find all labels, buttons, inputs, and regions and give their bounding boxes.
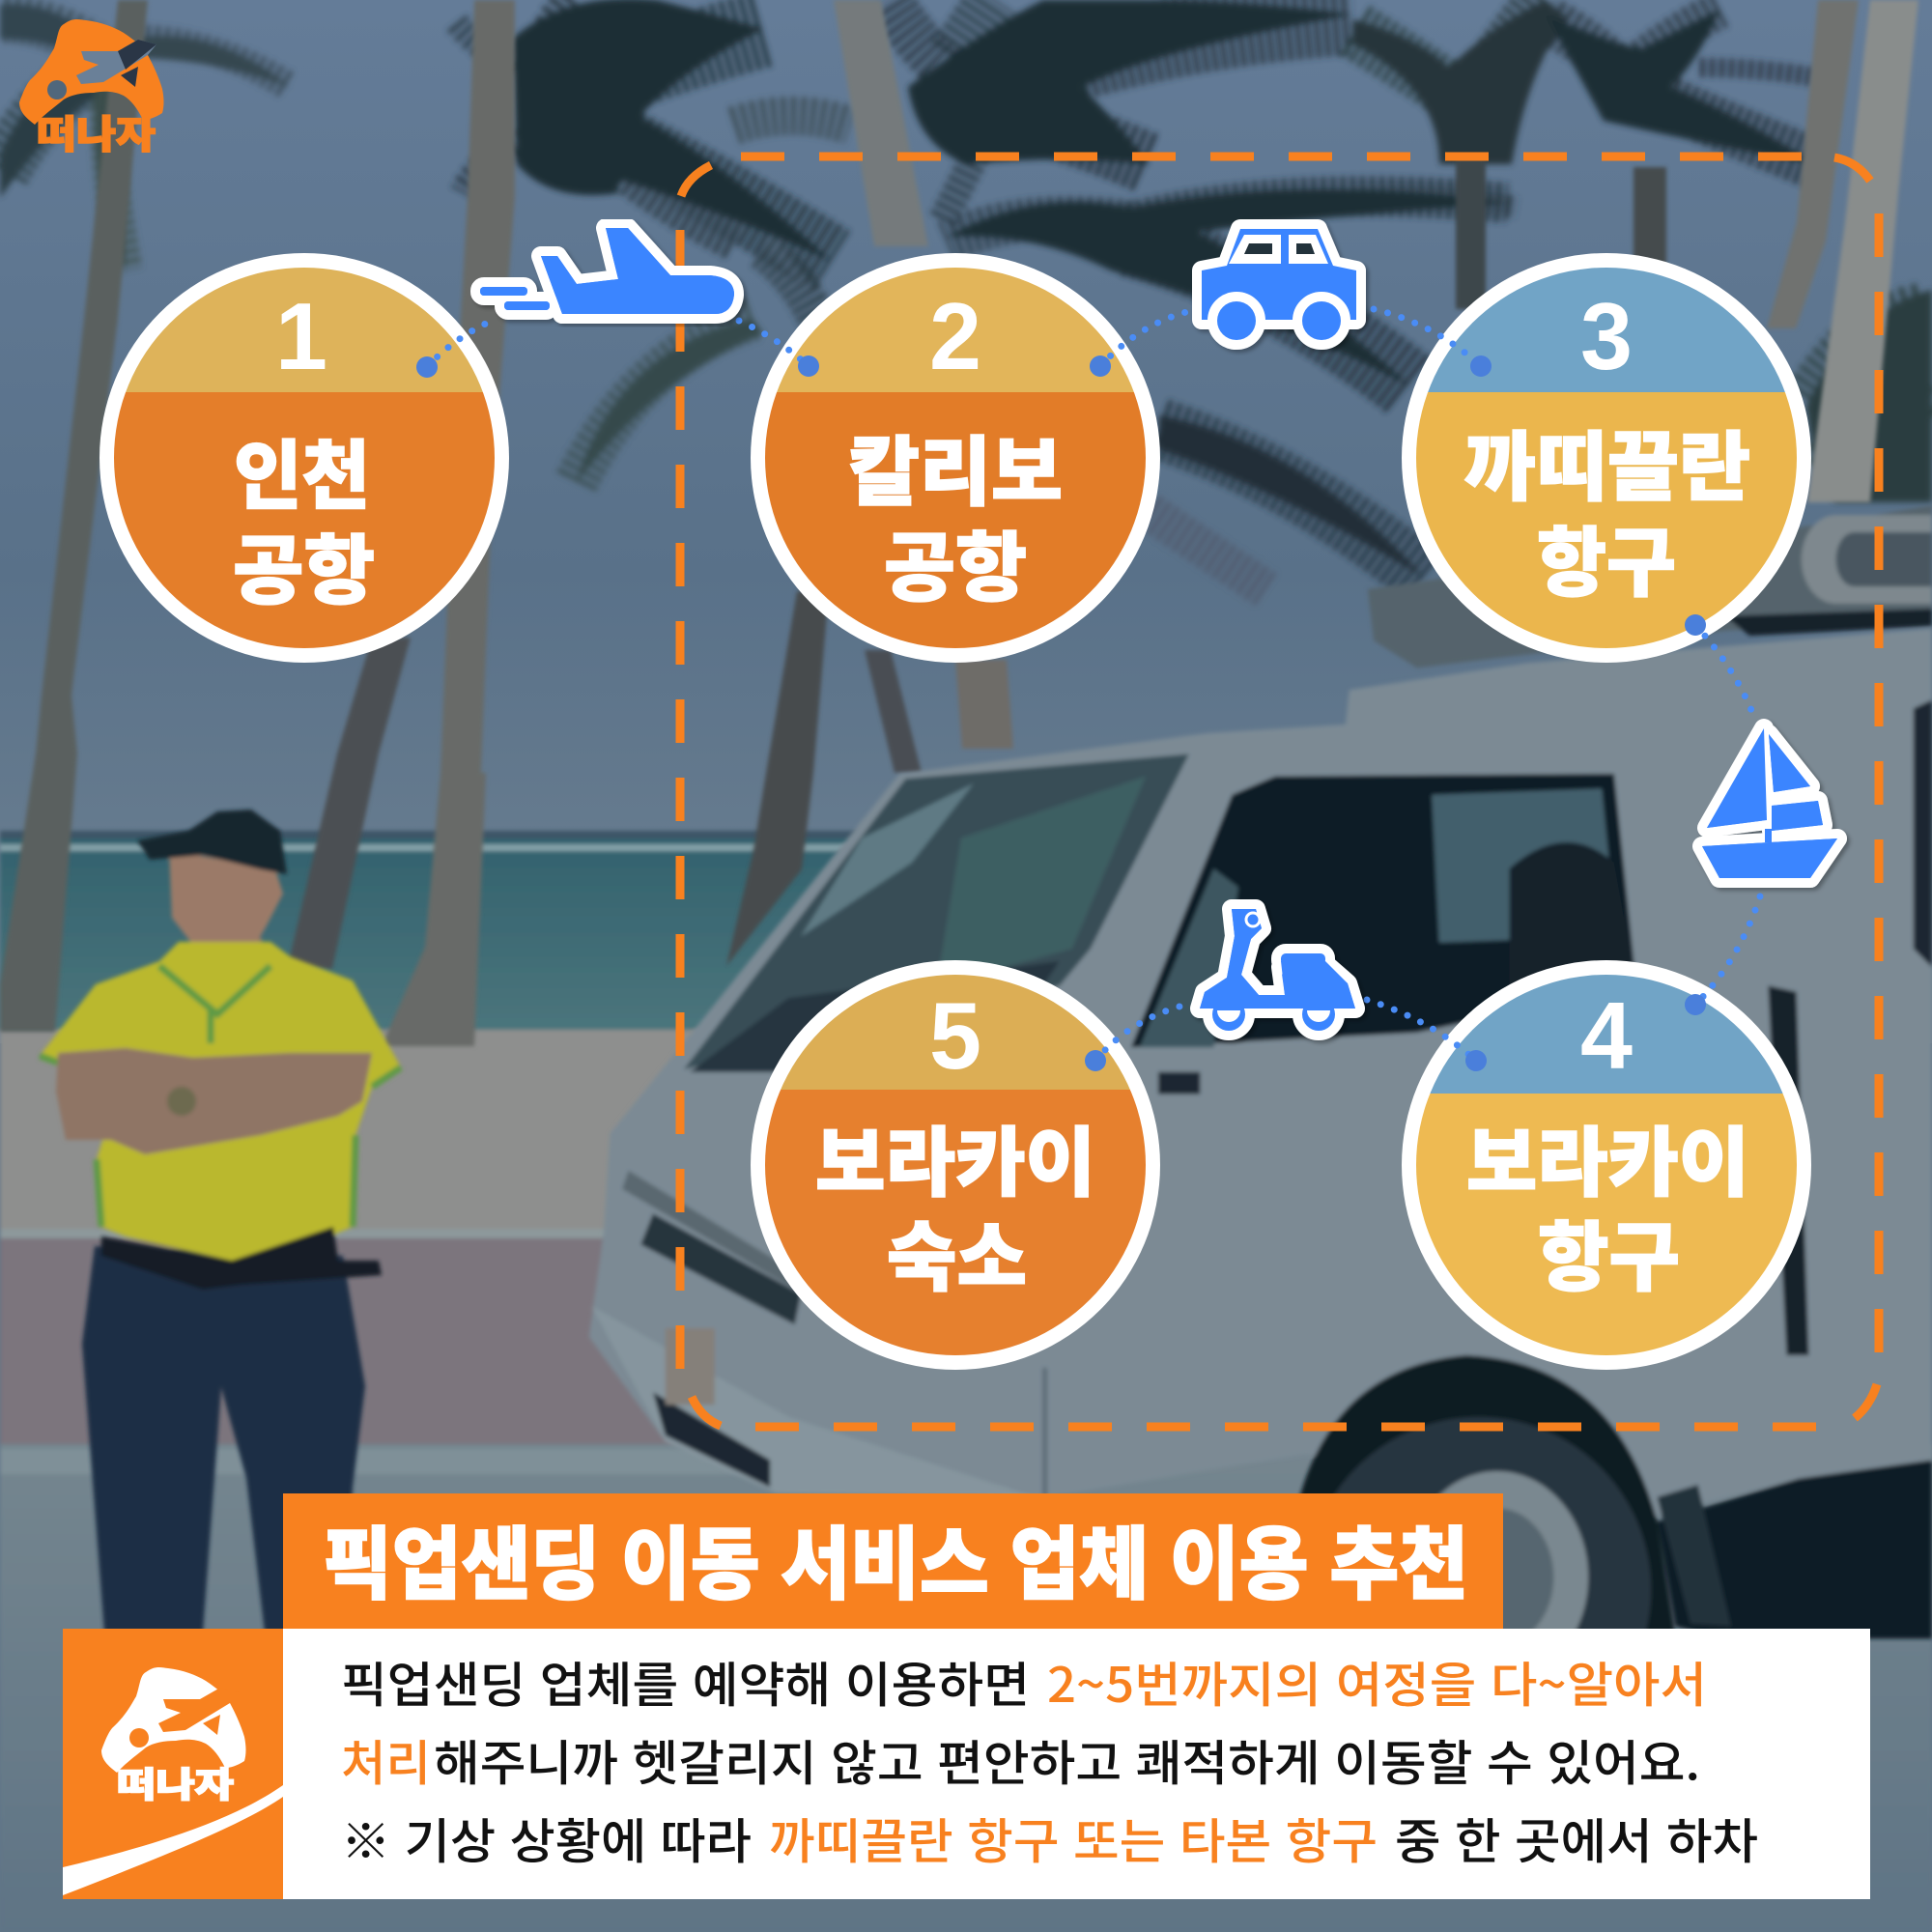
step circle 4: 보라카이 항구: 항구 [1538, 1198, 1680, 1306]
title banner: 픽업샌딩 이동 서비스 업체 이용 추천 [323, 1500, 1468, 1615]
logo: white brand mark: 떠나자 [117, 1757, 234, 1807]
step circle 2: 칼리보 공항: 2 [929, 283, 981, 389]
panel: description text [283, 1629, 1870, 1899]
panel: logo block [63, 1629, 283, 1899]
step circle 3: 까띠끌란 항구: 3 [1580, 283, 1633, 389]
palm trunks [0, 0, 1918, 1046]
text line 3 [341, 1804, 1758, 1873]
text line 1: 픽업샌딩 업체를 예약해 이용하면 [341, 1647, 1030, 1717]
icon: airplane [480, 228, 734, 314]
logo: top-left brand mark [19, 19, 164, 159]
step circle 5: 보라카이 숙소: 숙소 [887, 1198, 1027, 1306]
logo: top-left brand mark: 떠나자 [37, 103, 156, 159]
text line 1 [341, 1647, 1707, 1717]
swoosh [63, 1785, 283, 1895]
dashed route frame [680, 156, 1879, 1427]
step circle 4: 보라카이 항구: 보라카이 [1466, 1103, 1749, 1211]
man in yellow shirt [40, 810, 401, 1633]
step circle 4: 보라카이 항구: 4 [1580, 982, 1633, 1089]
text line 3: ※ 기상 상황에 따라 [341, 1804, 752, 1873]
step circle 2: 칼리보 공항: 공항 [884, 508, 1027, 616]
icon: sailboat [1702, 728, 1837, 878]
sea and beach [0, 831, 1932, 1932]
text line 2: 처리 [341, 1725, 431, 1795]
step circle 5: 보라카이 숙소: 보라카이 [815, 1103, 1095, 1211]
step circle 1: 인천 공항: 공항 [233, 511, 375, 619]
step circle 3: 까띠끌란 항구: 까띠끌란 [1464, 408, 1750, 516]
step circle 5: 보라카이 숙소 [744, 956, 1169, 1370]
step circle 3: 까띠끌란 항구 [1391, 251, 1816, 672]
step circle 1: 인천 공항 [97, 251, 512, 672]
icon: car [1202, 229, 1356, 340]
step circle 3: 까띠끌란 항구: 항구 [1537, 503, 1676, 611]
icon: scooter [1200, 909, 1355, 1031]
text line 1: 2~5번까지의 여정을 다~알아서 [1047, 1647, 1707, 1717]
step circle 5: 보라카이 숙소: 5 [929, 982, 981, 1089]
palm fronds [0, 0, 1932, 589]
text line 3: 중 한 곳에서 하차 [1395, 1804, 1758, 1873]
step circle 2: 칼리보 공항 [744, 251, 1169, 672]
step circle 1: 인천 공항: 1 [275, 283, 327, 389]
dotted route lines with waypoint dots [416, 309, 1760, 1071]
van [589, 505, 1932, 1762]
step circle 1: 인천 공항: 인천 [234, 416, 370, 525]
text line 2: 해주니까 헷갈리지 않고 편안하고 쾌적하게 이동할 수 있어요. [434, 1725, 1700, 1795]
text line 3: 까띠끌란 항구 또는 타본 항구 [769, 1804, 1378, 1873]
step circle 4: 보라카이 항구 [1391, 956, 1816, 1374]
step circle 2: 칼리보 공항: 칼리보 [848, 412, 1063, 521]
logo: white brand mark [101, 1667, 245, 1807]
